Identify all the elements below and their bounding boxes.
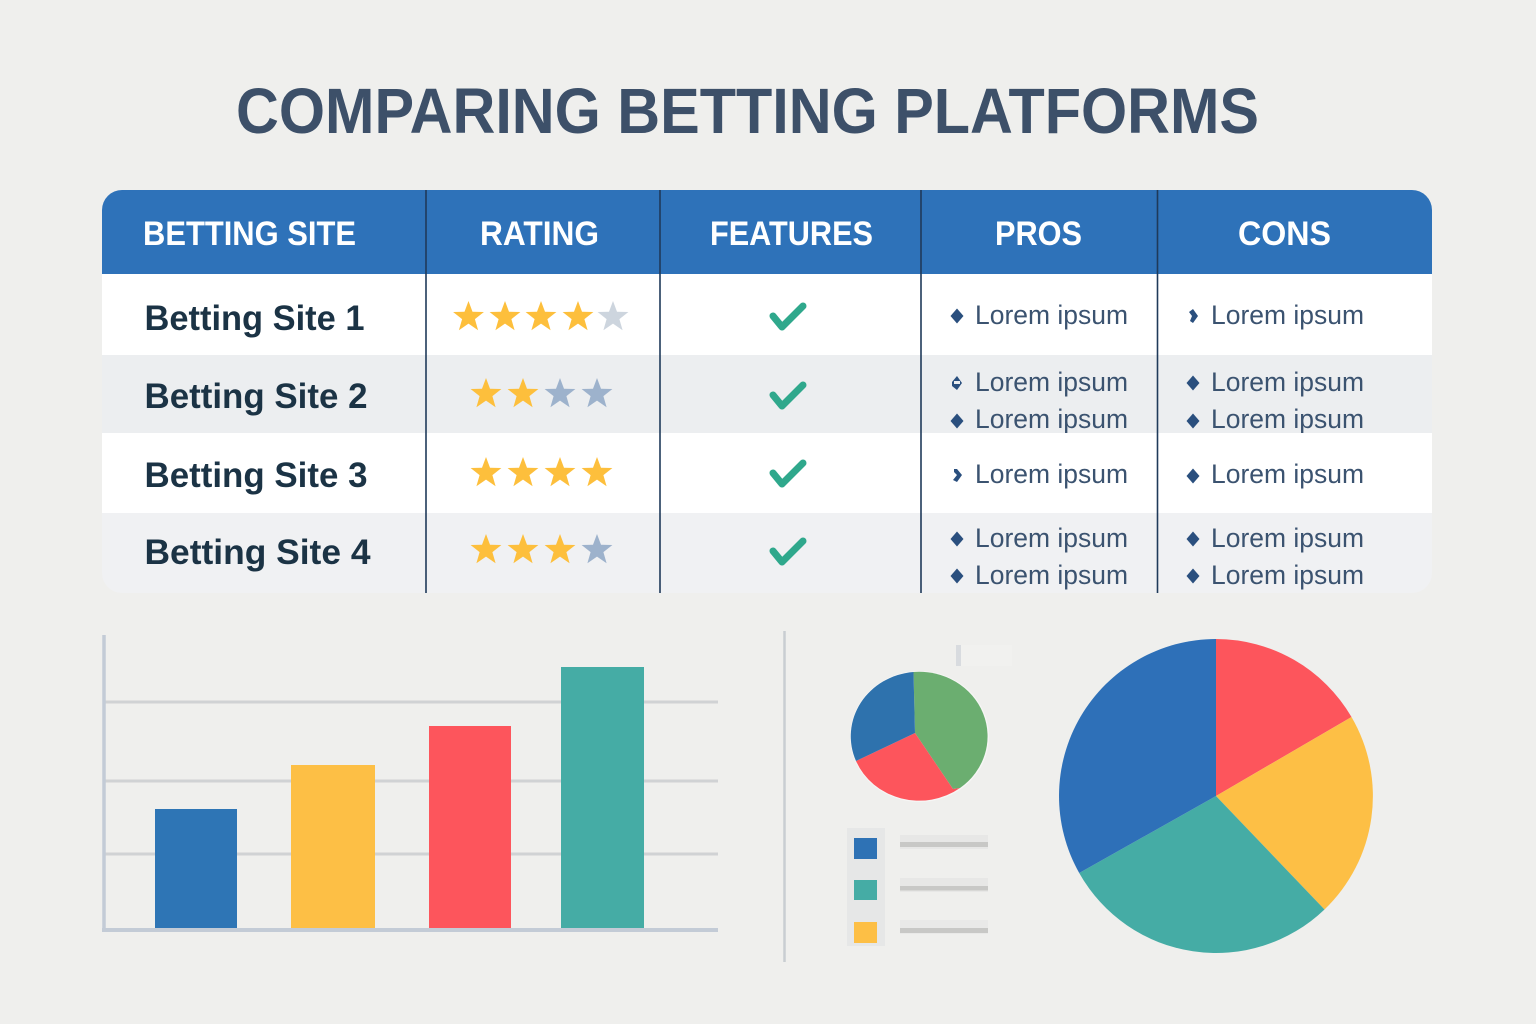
table header row: PROS — [995, 215, 1082, 253]
row: Betting Site 4: Lorem ipsum — [975, 560, 1128, 590]
legend item: teal — [854, 880, 877, 900]
comparison table — [102, 190, 1432, 593]
row: Betting Site 3: Lorem ipsum — [1211, 459, 1364, 489]
faded label placeholder — [956, 645, 1012, 666]
row: Betting Site 2: Betting Site 2 — [144, 377, 368, 416]
table header row: FEATURES — [710, 215, 873, 253]
row: Betting Site 4: Lorem ipsum — [1211, 523, 1364, 553]
table header row: BETTING SITE — [143, 215, 356, 253]
row: Betting Site 4 — [146, 528, 1362, 590]
large pie chart — [1059, 639, 1373, 953]
bar: blue — [155, 809, 237, 928]
row: Betting Site 2: Lorem ipsum — [1211, 404, 1364, 434]
bar: teal — [561, 667, 644, 928]
row: Betting Site 2: Lorem ipsum — [1211, 367, 1364, 397]
row: Betting Site 4: Betting Site 4 — [144, 533, 371, 572]
row: Betting Site 3 — [102, 433, 1432, 513]
legend item: yellow — [854, 922, 877, 943]
row: Betting Site 4: Lorem ipsum — [1211, 560, 1364, 590]
row: Betting Site 1 — [102, 274, 1432, 355]
row: Betting Site 1: Lorem ipsum — [975, 300, 1128, 330]
row: Betting Site 1: Betting Site 1 — [144, 299, 364, 338]
small pie chart — [850, 671, 989, 802]
infographic canvas — [102, 88, 1432, 962]
row: Betting Site 2 — [146, 372, 1362, 433]
row: Betting Site 4: Lorem ipsum — [975, 523, 1128, 553]
row: Betting Site 2: Lorem ipsum — [975, 404, 1128, 434]
row: Betting Site 1: Lorem ipsum — [1211, 300, 1364, 330]
bar chart — [102, 635, 718, 932]
row: Betting Site 3: Betting Site 3 — [144, 456, 368, 495]
row: Betting Site 3: Lorem ipsum — [975, 459, 1128, 489]
legend item: blue — [854, 838, 877, 859]
legend — [847, 828, 988, 946]
row: Betting Site 2: Lorem ipsum — [975, 367, 1128, 397]
table header row: RATING — [480, 215, 599, 253]
table header row — [102, 190, 1432, 274]
bar: red — [429, 726, 511, 928]
title: COMPARING BETTING PLATFORMS — [236, 75, 1259, 147]
bar: yellow — [291, 765, 375, 928]
table header row: CONS — [1238, 215, 1331, 253]
